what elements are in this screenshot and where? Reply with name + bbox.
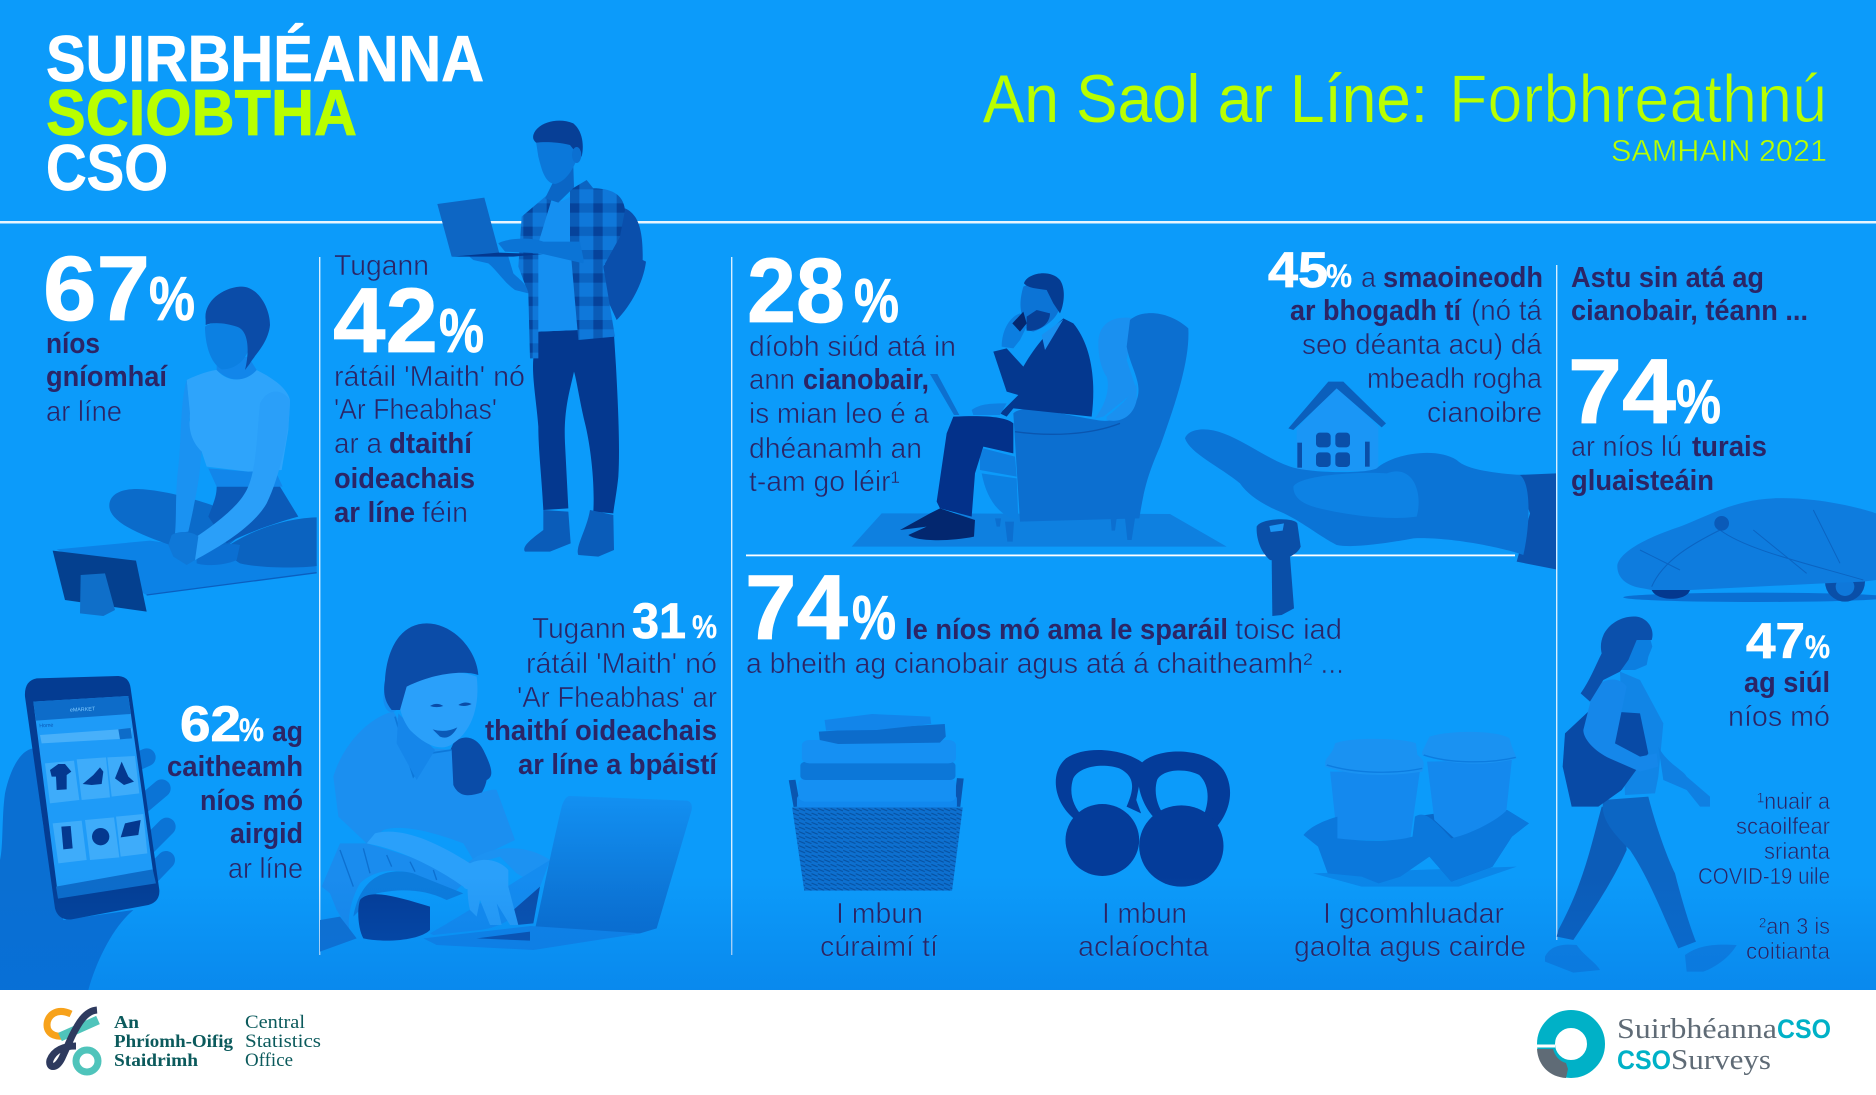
stat: 47%: % [1805, 629, 1830, 665]
stat: 67%: % [149, 265, 195, 334]
stat: 62%: níos mó [200, 785, 303, 817]
photo: businessman in armchair [852, 273, 1227, 547]
label: household chores [820, 898, 938, 963]
stat: 42%: dtaithí [389, 428, 473, 460]
stat: remote workers go [1568, 262, 1808, 497]
photo: man with laptop [437, 121, 646, 557]
logo: Central Statistics Office [47, 1010, 321, 1072]
stat: 45%: smaoineodh [1383, 262, 1543, 294]
footnotes [1698, 788, 1830, 964]
stat: 42%: féin [422, 497, 468, 529]
stat: 28% [747, 240, 956, 498]
stat: 45%: seo déanta acu) dá [1302, 329, 1542, 361]
stat: 31%: Tugann [532, 613, 626, 645]
logo: CSO Surveys: Suirbhéanna [1617, 1014, 1778, 1045]
photo: takeaway coffee cups [1303, 732, 1529, 887]
footnotes: COVID-19 uile [1698, 863, 1830, 889]
stat: 45%: 45 [1268, 242, 1328, 298]
photo: woman doing yoga [53, 287, 317, 616]
stat: 28%: 28 [747, 240, 845, 342]
label: family and friends: gaolta agus cairde [1294, 931, 1526, 963]
logo: Central Statistics Office: Staidrimh [114, 1050, 198, 1070]
column dividers [319, 257, 1557, 955]
label: exercise: I mbun [1102, 898, 1187, 930]
stat: 67%: níos [46, 328, 100, 360]
stat: 74% more spare time: 74 [745, 557, 848, 659]
label: household chores: I mbun [836, 898, 923, 930]
stat: 42%: rátáil 'Maith' nó [334, 361, 525, 393]
stat: 28%: ann [749, 364, 795, 396]
stat: 42% [333, 250, 525, 529]
title: CSO [46, 131, 168, 204]
stat: 28%: is mian leo é a [749, 398, 929, 430]
stat: 47% [1728, 613, 1830, 733]
stat: 47%: níos mó [1728, 701, 1830, 733]
stat: 45%: ar bhogadh tí [1290, 295, 1462, 327]
stat: 42%: % [439, 297, 484, 366]
logo: Central Statistics Office: Phríomh-Oifig [114, 1031, 233, 1051]
stat: 28%: díobh siúd atá in [749, 331, 956, 363]
stat: 31%: ar líne a bpáistí [518, 749, 718, 781]
photo: hand holding model house and key [1185, 382, 1556, 616]
stat: remote workers go: gluaisteáin [1571, 465, 1714, 497]
footnotes: ¹nuair a [1757, 788, 1830, 814]
stat: 62%: caitheamh [167, 751, 303, 783]
stat: 28%: cianobair, [803, 364, 929, 396]
stat: 67%: gníomhaí [46, 361, 168, 393]
label: exercise [1078, 898, 1209, 963]
stat: 74% more spare time: a bheith ag cianobair agus atá á chaitheamh² ... [746, 648, 1344, 680]
label: household chores: cúraimí tí [820, 931, 938, 963]
logo: CSO Surveys: CSO [1617, 1045, 1671, 1075]
stat: 62%: % [239, 712, 264, 748]
label: exercise: aclaíochta [1078, 931, 1209, 963]
stat: 62%: airgid [230, 818, 303, 850]
logo: CSO Surveys: Surveys [1671, 1045, 1771, 1076]
stat: 62%: ar líne [228, 853, 303, 885]
stat: remote workers go: ar níos lú [1571, 431, 1682, 463]
stat: 42%: ar a [334, 428, 382, 460]
bottom shading [0, 876, 1876, 990]
stat: 28%: % [854, 267, 899, 336]
label: family and friends: I gcomhluadar [1323, 898, 1505, 930]
logo: CSO Surveys [1535, 1014, 1831, 1078]
photo: walking woman with backpack [1545, 617, 1737, 973]
stat: 47%: ag siúl [1744, 667, 1830, 699]
footnotes: srianta [1764, 838, 1830, 864]
footnotes: ²an 3 is [1759, 913, 1830, 939]
stat: 31%: 'Ar Fheabhas' ar [517, 682, 717, 714]
stat: 31% [485, 593, 718, 781]
stat: remote workers go: 74 [1568, 341, 1676, 443]
logo: Central Statistics Office: Office [245, 1050, 293, 1071]
heading: An Saol ar Líne [983, 61, 1827, 168]
footnotes: coitianta [1746, 938, 1830, 964]
stat: 45%: % [1326, 258, 1352, 294]
stat: 62% [167, 696, 303, 885]
header divider [0, 221, 1876, 224]
stat: 31%: % [692, 609, 717, 645]
stat: remote workers go: turais [1692, 431, 1767, 463]
stat: 28%: dhéanamh an [749, 433, 922, 465]
logo: CSO Surveys: CSO [1777, 1014, 1831, 1044]
label: family and friends [1294, 898, 1526, 963]
stat: 47%: 47 [1746, 613, 1805, 669]
stat: 42%: ar líne [334, 497, 415, 529]
photo: covered car [1617, 498, 1876, 602]
stat: 62%: ag [272, 716, 303, 748]
title [46, 22, 484, 204]
photo: hand holding smartphone [0, 676, 167, 990]
stat: 42%: Tugann [334, 250, 429, 282]
stat: 42%: 'Ar Fheabhas' [334, 394, 497, 426]
stat: remote workers go: % [1676, 368, 1721, 437]
footer panel [0, 990, 1876, 1095]
logo: Central Statistics Office: Statistics [245, 1031, 321, 1052]
stat: 67%: ar líne [46, 396, 122, 428]
footnotes: scaoilfear [1736, 813, 1830, 839]
stat: 45%: cianoibre [1427, 397, 1542, 429]
heading: An Saol ar Líne: An Saol ar Líne: [983, 61, 1428, 137]
stat: 74% more spare time: toisc iad [1235, 614, 1342, 646]
stat: 42%: oideachais [334, 463, 475, 495]
stat: 67% [43, 238, 195, 428]
photo: hand holding smartphone: eMARKET [70, 706, 96, 714]
heading: An Saol ar Líne: Forbhreathnú [1449, 61, 1827, 137]
heading: An Saol ar Líne: SAMHAIN 2021 [1611, 133, 1827, 168]
stat: 74% more spare time: le níos mó ama le sparáil [905, 614, 1228, 646]
stat: 31%: rátáil 'Maith' nó [526, 648, 717, 680]
photo: kettlebells [1056, 750, 1230, 887]
logo: Central Statistics Office: An [114, 1012, 139, 1032]
stat: 45% [1268, 242, 1543, 429]
stat: 74% more spare time: % [852, 584, 896, 653]
photo: laundry basket [792, 714, 963, 891]
photo: hand holding smartphone: Home [39, 723, 54, 729]
stat: 31%: thaithí oideachais [485, 715, 717, 747]
logo: Central Statistics Office: Central [245, 1012, 305, 1033]
title: SUIRBHÉANNA [46, 22, 484, 95]
stat: 31%: 31 [632, 593, 686, 649]
stat: 62%: 62 [180, 696, 241, 752]
stat: remote workers go: cianobair, téann ... [1571, 295, 1808, 327]
stat: 45%: a [1361, 262, 1376, 294]
stat: 67%: 67 [43, 238, 150, 340]
stat: 28%: t-am go léir¹ [749, 466, 900, 498]
stat: 42%: 42 [333, 270, 438, 372]
stat: 45%: mbeadh rogha [1367, 363, 1542, 395]
stat: 45%: (nó tá [1471, 295, 1542, 327]
photo: girl with laptop [320, 623, 692, 952]
title: SCIOBTHA [46, 76, 357, 149]
stat: 74% more spare time [745, 557, 1344, 680]
stat: remote workers go: Astu sin atá ag [1571, 262, 1764, 294]
